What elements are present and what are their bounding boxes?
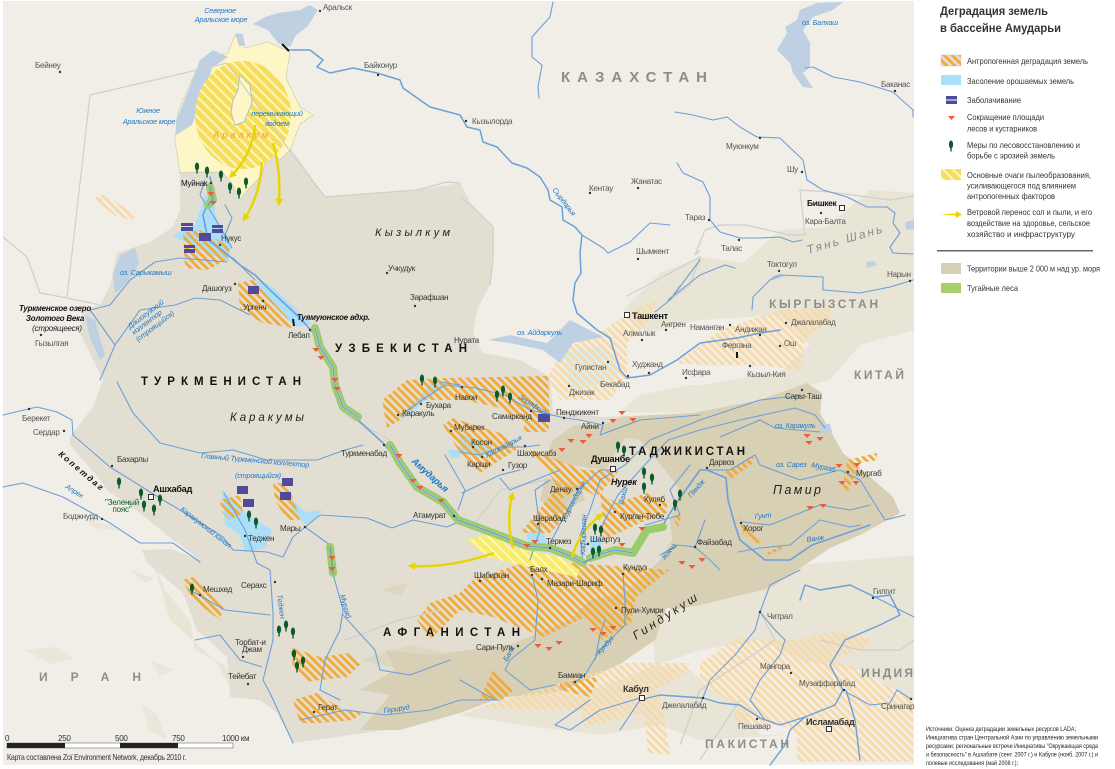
legend item: dust sources: антропогенных факторов bbox=[967, 191, 1055, 201]
Vakhsh bbox=[600, 408, 825, 530]
city labels: Косон bbox=[471, 438, 492, 447]
country and region labels: Тянь Шань bbox=[805, 222, 884, 257]
capital city markers bbox=[148, 206, 844, 732]
country and region labels: КАЗАХСТАН bbox=[561, 69, 707, 86]
Murghab river bbox=[305, 527, 450, 700]
city labels: Лебап bbox=[288, 331, 310, 340]
Kokcha bbox=[660, 520, 720, 570]
city labels: Кызылорда bbox=[472, 117, 513, 126]
Zeravshan bbox=[405, 382, 700, 435]
city labels: Жанатас bbox=[631, 177, 662, 186]
forest reduction markers bbox=[207, 192, 861, 651]
city labels: Фергана bbox=[722, 341, 752, 350]
city labels: Мешхед bbox=[203, 585, 233, 594]
city labels: Файзабад bbox=[697, 538, 732, 547]
scale bar: 500 bbox=[115, 734, 128, 743]
city labels: Бухара bbox=[426, 401, 452, 410]
city labels: Сари-Пуль bbox=[476, 643, 514, 652]
legend item: wind transport: воздействие на здоровье, сельское bbox=[967, 218, 1090, 228]
city labels: Музаффарабад bbox=[799, 679, 856, 688]
other lakes bbox=[85, 2, 914, 433]
Aydarkul lake bbox=[488, 320, 603, 363]
water labels: Кафирниган bbox=[578, 514, 588, 555]
city labels: Герат bbox=[318, 703, 338, 712]
water labels: (строящийся) bbox=[134, 309, 176, 344]
country and region labels: Кызылкум bbox=[375, 227, 450, 239]
country and region labels: Гиндукуш bbox=[630, 590, 700, 643]
country and region labels: (строящееся) bbox=[32, 324, 82, 333]
sources note: Источники: Оценка деградации земельных ресурсов LADA; bbox=[926, 727, 1076, 733]
legend item: anthropogenic degradation: Антропогенная деградация земель bbox=[967, 56, 1089, 66]
city labels: Токтогул bbox=[767, 260, 797, 269]
city labels: Каракуль bbox=[402, 409, 434, 418]
city labels: Шымкент bbox=[636, 247, 670, 256]
water labels: Балх bbox=[501, 644, 517, 663]
city labels: Ашхабад bbox=[153, 484, 192, 494]
city labels: Шибирган bbox=[474, 571, 509, 580]
water labels: Сырдарья bbox=[550, 186, 578, 217]
Amu Darya main channel bbox=[203, 177, 870, 563]
city labels: Шу bbox=[787, 165, 799, 174]
city labels: Кара-Балта bbox=[805, 217, 846, 226]
city labels: Мазари-Шариф bbox=[547, 579, 603, 588]
scale bar: 750 bbox=[172, 734, 185, 743]
water labels: Зерафшан bbox=[517, 392, 552, 418]
city labels: Талас bbox=[721, 244, 742, 253]
country and region labels: КЫРГЫЗСТАН bbox=[769, 297, 878, 311]
city labels: Шахрисабз bbox=[517, 449, 557, 458]
country and region labels bbox=[19, 69, 913, 751]
city labels: Бекабад bbox=[600, 380, 630, 389]
city labels: Джалалабад bbox=[791, 318, 836, 327]
country and region labels: АФГАНИСТАН bbox=[383, 627, 520, 639]
city labels: Сринагар bbox=[881, 702, 915, 711]
city labels: Сары-Таш bbox=[785, 392, 822, 401]
water labels: Дашогузский bbox=[125, 298, 165, 331]
water labels: Кокча bbox=[660, 541, 679, 561]
title bbox=[940, 4, 1061, 35]
city labels: Боджнурд bbox=[63, 512, 98, 521]
water labels: водоем bbox=[265, 119, 289, 128]
country and region labels: Туркменское озеро bbox=[19, 304, 91, 313]
Karakum canal bbox=[3, 407, 458, 557]
sources note: Инициатива стран Центральной Азии по управлению земельными bbox=[926, 734, 1098, 742]
water labels: Гунт bbox=[754, 510, 772, 521]
Atrek river bbox=[3, 483, 200, 562]
city labels: Гилгит bbox=[873, 587, 896, 596]
city labels: Навои bbox=[455, 393, 477, 402]
Amu Darya delta branches bbox=[200, 180, 255, 280]
high mountain territory above 2000 m bbox=[360, 383, 900, 730]
country and region labels: ПАКИСТАН bbox=[705, 737, 789, 751]
water labels: Герируд bbox=[383, 702, 410, 715]
city labels: Айни bbox=[581, 422, 599, 431]
Western Aral remnant bbox=[176, 50, 228, 135]
city labels: Кабул bbox=[623, 684, 649, 694]
city labels: Пенджикент bbox=[556, 408, 599, 417]
city labels: Термез bbox=[546, 537, 572, 546]
city labels: Джам bbox=[242, 645, 262, 654]
legend item: dust sources bbox=[941, 169, 1091, 201]
water labels: Аральское море bbox=[194, 15, 247, 24]
city labels: Денау bbox=[550, 485, 573, 494]
wind transport arrows bbox=[232, 125, 600, 566]
legend bbox=[937, 55, 1100, 293]
scale bar: Карта составлена Zoï Environment Network, декабрь 2010 г. bbox=[7, 753, 186, 762]
country borders bbox=[3, 63, 914, 760]
city labels: Нукус bbox=[221, 234, 241, 243]
legend item: wind transport bbox=[940, 207, 1092, 239]
waterlogging markers bbox=[181, 223, 550, 507]
city labels: Сердар bbox=[33, 428, 60, 437]
city labels: Бейнеу bbox=[35, 61, 62, 70]
city labels: Гулистан bbox=[575, 363, 606, 372]
city labels: Теджен bbox=[248, 534, 274, 543]
legend item: salinization bbox=[941, 75, 1075, 86]
transitional water body bbox=[231, 75, 252, 125]
scale bar bbox=[5, 734, 249, 762]
water labels: (строящийся) bbox=[235, 471, 281, 480]
dust source hatched circle bbox=[195, 61, 291, 169]
city labels: Кызыл-Кия bbox=[747, 370, 785, 379]
light hatch: anthropogenic degradation outside the basin bbox=[95, 195, 913, 762]
city labels: Байконур bbox=[364, 61, 398, 70]
city labels: Муйнак bbox=[181, 179, 208, 188]
city labels: Атамурат bbox=[413, 511, 447, 520]
city labels: Кентау bbox=[589, 184, 614, 193]
Tejen river bbox=[224, 493, 293, 743]
dams bbox=[282, 44, 737, 358]
city labels: Муюнкум bbox=[726, 142, 758, 151]
water labels: Вахш bbox=[616, 486, 630, 506]
dust source in Amu Darya delta bbox=[467, 533, 580, 577]
city labels: Бахарлы bbox=[117, 455, 148, 464]
legend item: tugai forests bbox=[941, 283, 1018, 293]
legend item: forest reduction: лесов и кустарников bbox=[967, 124, 1037, 134]
city labels: Бишкек bbox=[807, 198, 837, 208]
sources note: ресурсами; региональные встречи Инициативы "Окружающая среда bbox=[926, 744, 1099, 750]
Kafirnigan bbox=[580, 395, 805, 563]
city labels bbox=[22, 3, 915, 731]
legend item: waterlogging bbox=[946, 95, 1021, 105]
water labels: Каракумский канал bbox=[179, 504, 233, 550]
northern rivers bbox=[675, 112, 913, 254]
water labels: Ванж bbox=[806, 533, 825, 544]
tugai forest bands bbox=[208, 187, 663, 573]
small lakes bbox=[772, 220, 914, 280]
water labels: оз. Сарез bbox=[776, 460, 807, 469]
legend item: waterlogging: Заболачивание bbox=[967, 95, 1021, 105]
city labels: Гузор bbox=[508, 461, 528, 470]
scale bar: 1000 км bbox=[222, 734, 249, 743]
legend item: reforestation bbox=[949, 140, 1080, 160]
legend item: forest reduction: Сокращение площади bbox=[967, 112, 1044, 122]
Golden Age lake bbox=[85, 315, 105, 360]
water labels: Апрек bbox=[63, 482, 86, 500]
city labels: Читрал bbox=[767, 612, 793, 621]
Kashkadarya bbox=[460, 445, 540, 455]
Syr Darya bbox=[290, 50, 780, 378]
city labels: Мары bbox=[280, 524, 301, 533]
legend item: anthropogenic degradation bbox=[941, 55, 1089, 66]
water labels bbox=[63, 6, 838, 715]
water labels: оз. Сарыкамыш bbox=[120, 268, 172, 277]
city labels: Пешавар bbox=[738, 722, 771, 731]
Northern Aral remnant bbox=[253, 5, 318, 47]
country and region labels: ИРАН bbox=[39, 670, 141, 684]
legend item: dust sources: усиливающегося под влиянием bbox=[967, 180, 1076, 190]
strong hatch: anthropogenic degradation in the basin bbox=[182, 230, 877, 723]
city labels: Андижан bbox=[735, 325, 766, 334]
water labels: Сурхандарья bbox=[560, 479, 588, 521]
Amu Darya basin territory bbox=[70, 147, 900, 743]
water labels: Пяндж bbox=[686, 477, 707, 499]
Kunar, Indus tributaries and Kabul river bbox=[700, 570, 800, 705]
water labels: Теджен bbox=[275, 594, 287, 619]
city labels: Тараз bbox=[685, 213, 706, 222]
Gunt and Vanj bbox=[738, 505, 870, 552]
city labels: Карши bbox=[467, 460, 490, 469]
water labels: Аральское море bbox=[122, 117, 175, 126]
country and region labels: КИТАЙ bbox=[854, 367, 904, 382]
city labels: Курган-Тюбе bbox=[620, 512, 665, 521]
Sarykamysh lake bbox=[113, 248, 139, 293]
water labels: Кашкадарья bbox=[484, 433, 523, 460]
city labels: Мангора bbox=[760, 662, 791, 671]
water labels: оз. Айдаркуль bbox=[517, 328, 562, 337]
city labels: Самарканд bbox=[492, 412, 532, 421]
city labels: Тейебат bbox=[228, 672, 257, 681]
country and region labels: Копетдаг bbox=[57, 449, 107, 493]
country and region labels: пояс" bbox=[113, 505, 132, 514]
city labels: Дашогуз bbox=[202, 284, 232, 293]
city labels: Ангрен bbox=[661, 320, 686, 329]
settlement dots bbox=[28, 10, 912, 720]
city labels: Мубарек bbox=[454, 423, 485, 432]
city labels: Джелалабад bbox=[662, 701, 707, 710]
city labels: Берекет bbox=[22, 414, 51, 423]
city labels: Нарын bbox=[887, 270, 911, 279]
country and region labels: Каракумы bbox=[230, 412, 305, 424]
country and region labels: Туямуюнское вдхр. bbox=[297, 313, 370, 322]
city labels: Торбат-и bbox=[235, 638, 266, 647]
legend item: dust sources: Основные очаги пылеобразования, bbox=[967, 170, 1091, 180]
sources note bbox=[926, 727, 1099, 767]
water labels: перемыкающий bbox=[251, 109, 303, 118]
city labels: Ташкент bbox=[632, 311, 669, 321]
country and region labels: "Зеленый bbox=[105, 498, 139, 507]
Surkhandarya bbox=[530, 470, 612, 560]
legend item: reforestation: Меры по лесовосстановлению и bbox=[967, 140, 1080, 150]
panel: Aralkum dried seabed bbox=[175, 35, 313, 200]
Balkh bbox=[460, 575, 555, 700]
Aral sea remnants bbox=[176, 5, 318, 135]
city labels: Аральск bbox=[323, 3, 353, 12]
legend item: reforestation: борьбе с эрозией земель bbox=[967, 150, 1056, 160]
scale bar: 250 bbox=[58, 734, 71, 743]
sources note: и безопасность" в Ашхабате (сент. 2007 г.) и Кабуле (нояб. 2007 г.) и bbox=[926, 752, 1098, 758]
city labels: Учкудук bbox=[388, 264, 416, 273]
city labels: Балх bbox=[530, 565, 548, 574]
city labels: Ош bbox=[784, 339, 796, 348]
Herirud bbox=[300, 700, 500, 720]
scale bar: 0 bbox=[5, 734, 10, 743]
country and region labels: ИНДИЯ bbox=[861, 666, 913, 680]
city labels: Баканас bbox=[881, 80, 910, 89]
city labels: Бамиан bbox=[558, 671, 585, 680]
reforestation markers bbox=[117, 162, 682, 672]
legend item: forest reduction bbox=[948, 112, 1044, 134]
city labels: Пули-Хумри bbox=[621, 606, 663, 615]
city labels: Исфара bbox=[682, 368, 711, 377]
water labels: коллектор bbox=[130, 308, 164, 337]
Turkmen collector canals bbox=[90, 258, 250, 380]
city labels: Серахс bbox=[241, 581, 267, 590]
city labels: Исламабад bbox=[806, 717, 855, 727]
title: в бассейне Амударьи bbox=[940, 21, 1061, 35]
water labels: Мургаб bbox=[338, 593, 353, 620]
salinization of irrigated land bbox=[173, 192, 602, 560]
country and region labels: ТАДЖИКИСТАН bbox=[629, 446, 745, 458]
city labels: Зарафшан bbox=[410, 293, 448, 302]
city labels: Ургенч bbox=[243, 303, 267, 312]
country and region labels: УЗБЕКИСТАН bbox=[335, 343, 467, 355]
Panj and Kulyab bbox=[645, 455, 905, 525]
city labels: Нурата bbox=[454, 336, 480, 345]
city labels: Хорог bbox=[743, 524, 764, 533]
city labels: Джизак bbox=[569, 388, 595, 397]
country and region labels: ТУРКМЕНИСТАН bbox=[141, 376, 301, 388]
city labels: Наманган bbox=[690, 323, 724, 332]
water labels: Южное bbox=[136, 106, 160, 115]
legend item: tugai forests: Тугайные леса bbox=[967, 283, 1018, 293]
Lake Balkhash bbox=[777, 2, 843, 88]
water labels: Главный Туркменский коллектор bbox=[201, 451, 310, 469]
city labels: Душанбе bbox=[591, 454, 630, 464]
city labels: Шаартуз bbox=[590, 535, 621, 544]
mountains outside the basin bbox=[25, 190, 914, 740]
title: Деградация земель bbox=[940, 4, 1048, 18]
water labels: Кундуз bbox=[595, 633, 616, 656]
city labels: Куляб bbox=[644, 495, 665, 504]
water labels: оз. Балхаш bbox=[802, 18, 838, 27]
city labels: Мургаб bbox=[856, 469, 882, 478]
country and region labels: Памир bbox=[773, 483, 821, 497]
city labels: Худжанд bbox=[632, 360, 663, 369]
city labels: Нурек bbox=[611, 477, 637, 487]
city labels: Гызылгая bbox=[35, 339, 68, 348]
city labels: Шерабад bbox=[533, 514, 566, 523]
city labels: Дарвоз bbox=[709, 458, 735, 467]
water labels: оз. Каракуль bbox=[775, 421, 816, 430]
city labels: Алмалык bbox=[623, 329, 656, 338]
city labels: Туркменабад bbox=[341, 449, 387, 458]
country and region labels: Золотого Века bbox=[26, 314, 85, 323]
country and region labels: Аралкум bbox=[212, 130, 268, 140]
legend item: wind transport: Ветровой перенос сол и пыли, и его bbox=[967, 207, 1092, 217]
water labels: Северное bbox=[204, 6, 236, 15]
legend item: wind transport: хозяйство и инфраструктуру bbox=[967, 229, 1076, 239]
legend item: salinization: Засоление орошаемых земель bbox=[967, 76, 1075, 86]
city labels: Кундуз bbox=[623, 563, 648, 572]
water labels: Амударья bbox=[408, 455, 451, 495]
water labels: Мургаб bbox=[811, 460, 837, 474]
sources note: полевые исследования (май 2008 г.); bbox=[926, 760, 1018, 767]
